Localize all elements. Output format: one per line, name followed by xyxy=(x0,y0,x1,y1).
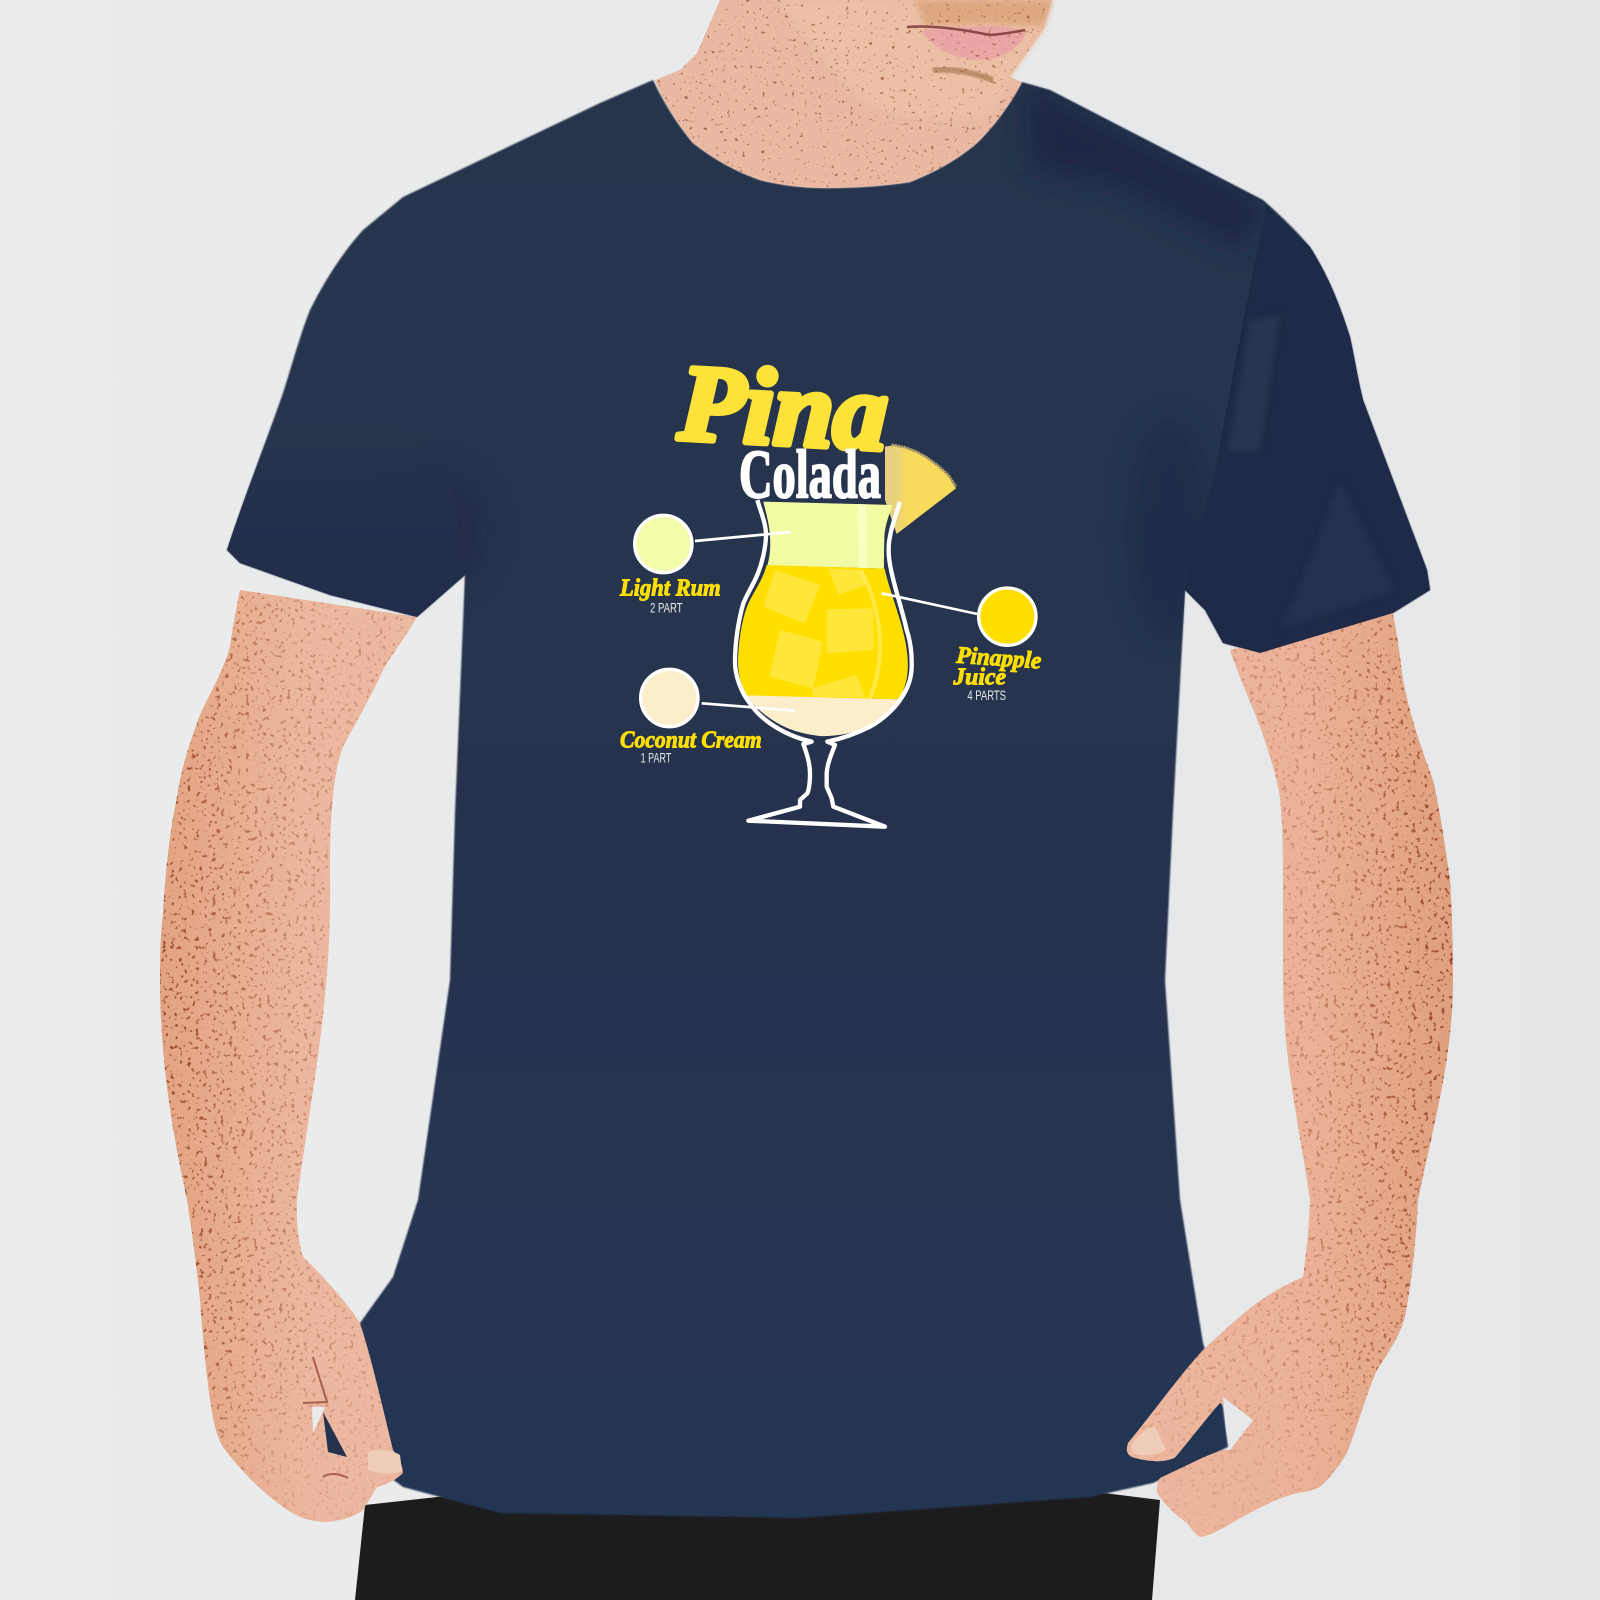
left hand gap xyxy=(312,1407,325,1433)
callout: light rum xyxy=(619,515,791,616)
glass highlight xyxy=(862,572,880,698)
ice cubes xyxy=(763,569,873,697)
right arm freckles xyxy=(1120,600,1460,1540)
name: Coconut Cream xyxy=(620,726,762,753)
chin crease xyxy=(933,70,993,80)
cocktail glass xyxy=(735,500,912,827)
right thumbnail xyxy=(1131,1426,1166,1455)
black trousers xyxy=(355,1480,1160,1600)
right sleeve seam xyxy=(1220,210,1267,450)
leader line xyxy=(882,593,977,614)
right sleeve xyxy=(1185,205,1430,653)
left arm freckles xyxy=(160,592,414,1520)
left sleeve xyxy=(227,393,465,617)
leader line xyxy=(702,703,795,711)
title: Pina: Pina xyxy=(675,343,891,473)
rum layer xyxy=(763,502,893,569)
quantity: 4 PARTS xyxy=(967,687,1006,703)
lips xyxy=(923,26,1027,60)
name line 1: Pinapple xyxy=(955,643,1043,675)
left finger crease xyxy=(323,1474,348,1478)
left hand shirt gap xyxy=(323,1412,347,1457)
right hand gap xyxy=(1223,1397,1253,1450)
left arm and hand xyxy=(150,580,430,1530)
left underarm shadow xyxy=(448,492,474,600)
quantity: 2 PART xyxy=(650,600,683,616)
rum highlight xyxy=(857,504,867,569)
callout: coconut cream xyxy=(620,669,795,766)
callout: pineapple juice xyxy=(882,588,1043,703)
name line 2: Juice xyxy=(952,665,1006,691)
right underarm shadow xyxy=(1142,439,1202,650)
printed design: pina colada recipe xyxy=(619,343,1043,827)
wedge rind xyxy=(892,445,956,487)
chin shape xyxy=(777,0,1052,121)
leader line xyxy=(695,532,791,541)
coconut cream layer xyxy=(747,695,899,736)
pineapple wedge xyxy=(885,445,956,534)
name: Light Rum xyxy=(619,574,721,601)
pineapple juice layer xyxy=(738,565,908,699)
fabric shading xyxy=(390,82,1267,640)
title: Colada: Colada xyxy=(739,436,881,512)
t-shirt xyxy=(227,80,1430,1518)
swatch xyxy=(635,515,692,573)
right arm and hand xyxy=(1120,600,1460,1540)
neck freckles xyxy=(657,0,1052,188)
right sleeve light fold xyxy=(1228,315,1280,450)
right shoulder shadow xyxy=(1022,82,1267,250)
neck and chin xyxy=(655,0,1056,188)
sleeve hems over arms xyxy=(227,205,1430,653)
left thumb crease xyxy=(303,1357,327,1403)
right sleeve hem fold xyxy=(1280,480,1395,630)
mouth line xyxy=(907,27,1025,35)
swatch xyxy=(979,588,1036,645)
left thumbnail xyxy=(368,1450,402,1473)
quantity: 1 PART xyxy=(641,750,672,766)
swatch xyxy=(641,669,698,727)
glass outline xyxy=(735,500,912,827)
shirt hem pinched by right hand xyxy=(1120,1447,1225,1488)
upper lip stubble xyxy=(915,0,1052,26)
